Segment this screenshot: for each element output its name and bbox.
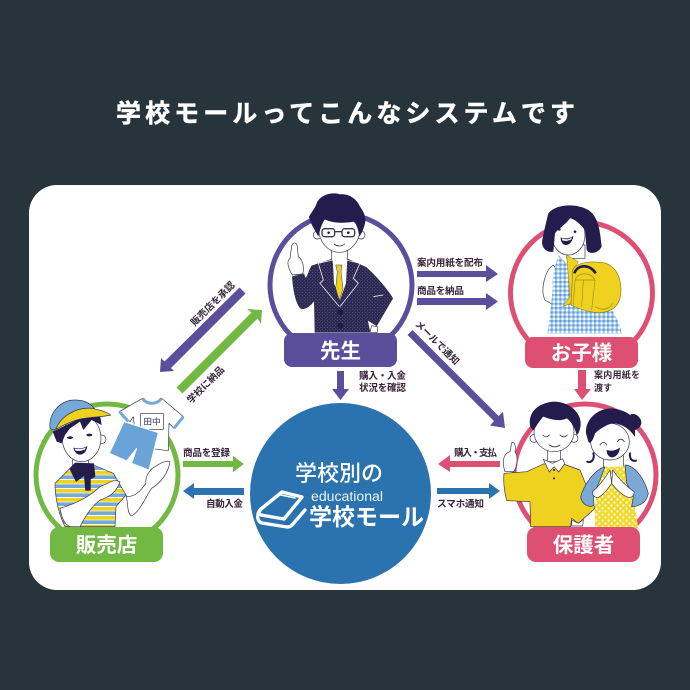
label: 保護者: 保護者 [553, 534, 614, 557]
illustration: teacher [288, 193, 393, 332]
arrow: 案内用紙を渡す: 案内用紙を [594, 369, 640, 380]
arrow: 案内用紙を渡す: 渡す [594, 382, 612, 393]
arrow: 案内用紙を渡す [574, 369, 640, 400]
node: school mall circle [250, 403, 431, 584]
node: teacher [270, 193, 412, 367]
illustration: parents [503, 402, 648, 528]
label: 販売店 [50, 527, 163, 562]
illustration: child [542, 205, 622, 333]
label: お子様: お子様 [551, 342, 613, 365]
label: 保護者 [527, 527, 640, 562]
arrow: 購入・入金 状況を確認: 購入・入金 [359, 370, 406, 382]
arrow: 商品を納品 [417, 285, 498, 310]
arrow: 案内用紙を配布 [417, 257, 498, 282]
arrow: メールで通知 [408, 318, 505, 428]
arrow: 販売店を承認: 販売店を承認 [188, 279, 238, 328]
arrow: 学校に納品: 学校に納品 [185, 364, 227, 406]
panel: diagram card [29, 185, 661, 590]
arrow: 販売店を承認 [160, 279, 246, 372]
label: 先生: 先生 [320, 340, 361, 363]
arrow: 商品を登録 [183, 447, 244, 472]
arrow: 学校に納品 [176, 309, 262, 406]
arrow: 購入・支払 [438, 447, 500, 472]
node: shop [36, 398, 183, 562]
arrow: 購入・入金 状況を確認: 状況を確認 [359, 382, 406, 394]
illustration: shop staff [50, 398, 183, 527]
arrow: 購入・支払: 購入・支払 [454, 447, 497, 459]
arrow: 購入・入金 状況を確認 [332, 370, 406, 400]
label: 先生 [284, 333, 397, 367]
logo text: 学校モール: 学校モール [309, 504, 424, 530]
node: parents [503, 402, 656, 562]
title: 学校モールってこんなシステムです [116, 100, 575, 128]
icon: book [258, 492, 305, 527]
label: お子様 [525, 337, 638, 368]
arrow: 自動入金 [183, 483, 244, 510]
arrow: 案内用紙を配布: 案内用紙を配布 [417, 257, 483, 269]
arrow: メールで通知: メールで通知 [413, 318, 462, 367]
text: educational: educational [311, 489, 383, 504]
heading: 学校別の: 学校別の [295, 461, 383, 486]
arrow: 自動入金: 自動入金 [206, 498, 243, 510]
illustration: shop staff: 田中 [143, 416, 161, 427]
arrow: スマホ通知: スマホ通知 [437, 498, 484, 510]
node: child [510, 205, 652, 368]
label: 販売店: 販売店 [76, 534, 137, 557]
arrow: スマホ通知 [437, 483, 500, 510]
arrow: 商品を登録: 商品を登録 [183, 447, 230, 459]
arrow: 商品を納品: 商品を納品 [417, 285, 464, 297]
